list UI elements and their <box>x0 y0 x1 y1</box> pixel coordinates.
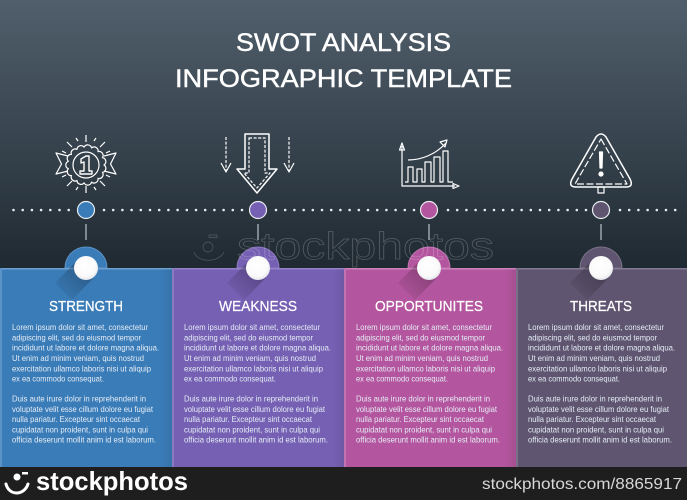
body text: voluptate velit esse cillum dolore eu fugiat <box>356 404 498 414</box>
panel: weakness <box>172 247 344 467</box>
body text: voluptate velit esse cillum dolore eu fugiat <box>12 404 154 414</box>
body text: incididunt ut labore et dolore magna aliqua. <box>12 343 159 353</box>
body text: Duis aute irure dolor in reprehenderit in <box>184 394 318 404</box>
panel: opportunities <box>344 247 516 467</box>
body text <box>184 322 331 445</box>
body text <box>528 322 675 445</box>
body text: nulla pariatur. Excepteur sint occaecat <box>12 414 141 424</box>
icon: down arrow <box>221 134 294 193</box>
body text <box>356 322 503 445</box>
body text: officia deserunt mollit anim id est laborum. <box>184 435 328 445</box>
body text: ex ea commodo consequat. <box>356 374 448 384</box>
body text: adipiscing elit, sed do eiusmod tempor <box>12 332 141 342</box>
knob <box>246 256 270 280</box>
body text: Ut enim ad minim veniam, quis nostrud <box>184 353 316 363</box>
body text: exercitation ullamco laboris nisi ut aliquip <box>12 363 151 373</box>
body text: Ut enim ad minim veniam, quis nostrud <box>356 353 488 363</box>
footer logo: stockphotos <box>36 466 188 496</box>
title: INFOGRAPHIC TEMPLATE <box>175 65 512 93</box>
icon: medal <box>56 135 116 193</box>
body text: Lorem ipsum dolor sit amet, consectetur <box>12 322 148 332</box>
panel: threats <box>516 247 687 467</box>
body text: Duis aute irure dolor in reprehenderit in <box>12 394 146 404</box>
watermark: stockphotos <box>237 226 494 268</box>
title: SWOT ANALYSIS <box>236 29 451 57</box>
background <box>0 0 687 268</box>
body text: exercitation ullamco laboris nisi ut aliquip <box>356 363 495 373</box>
body text: adipiscing elit, sed do eiusmod tempor <box>356 332 485 342</box>
title <box>175 29 512 93</box>
timeline nodes and connectors <box>78 202 610 240</box>
body text: nulla pariatur. Excepteur sint occaecat <box>356 414 485 424</box>
body text: nulla pariatur. Excepteur sint occaecat <box>184 414 313 424</box>
panel: strength <box>0 247 172 467</box>
body text <box>12 322 159 445</box>
knob <box>74 256 98 280</box>
body text: ex ea commodo consequat. <box>528 374 620 384</box>
heading: OPPORTUNITES <box>375 299 483 315</box>
watermark <box>194 226 494 268</box>
icon: warning sign <box>571 134 631 193</box>
body text: incididunt ut labore et dolore magna aliqua. <box>356 343 503 353</box>
body text: officia deserunt mollit anim id est laborum. <box>528 435 672 445</box>
body text: officia deserunt mollit anim id est laborum. <box>356 435 500 445</box>
body text: Duis aute irure dolor in reprehenderit in <box>356 394 490 404</box>
footer bar <box>0 467 687 500</box>
body text: incididunt ut labore et dolore magna aliqua. <box>184 343 331 353</box>
icon: growth chart <box>400 140 459 188</box>
body text: cupidatat non proident, sunt in culpa qui <box>356 424 492 434</box>
body text: ex ea commodo consequat. <box>184 374 276 384</box>
dotted timeline <box>14 209 676 211</box>
footer image id: stockphotos.com/8865917 <box>482 476 682 493</box>
body text: cupidatat non proident, sunt in culpa qui <box>12 424 148 434</box>
body text: cupidatat non proident, sunt in culpa qui <box>528 424 664 434</box>
body text: Ut enim ad minim veniam, quis nostrud <box>12 353 144 363</box>
body text: ex ea commodo consequat. <box>12 374 104 384</box>
body text: exercitation ullamco laboris nisi ut aliquip <box>528 363 667 373</box>
body text: exercitation ullamco laboris nisi ut aliquip <box>184 363 323 373</box>
body text: Lorem ipsum dolor sit amet, consectetur <box>356 322 492 332</box>
body text: adipiscing elit, sed do eiusmod tempor <box>184 332 313 342</box>
body text: adipiscing elit, sed do eiusmod tempor <box>528 332 657 342</box>
body text: Ut enim ad minim veniam, quis nostrud <box>528 353 660 363</box>
body text: voluptate velit esse cillum dolore eu fugiat <box>528 404 670 414</box>
body text: cupidatat non proident, sunt in culpa qui <box>184 424 320 434</box>
body text: Lorem ipsum dolor sit amet, consectetur <box>184 322 320 332</box>
heading: THREATS <box>570 299 632 315</box>
body text: Duis aute irure dolor in reprehenderit in <box>528 394 662 404</box>
heading: STRENGTH <box>49 299 123 315</box>
body text: voluptate velit esse cillum dolore eu fugiat <box>184 404 326 414</box>
heading: WEAKNESS <box>219 299 297 315</box>
body text: nulla pariatur. Excepteur sint occaecat <box>528 414 657 424</box>
body text: officia deserunt mollit anim id est laborum. <box>12 435 156 445</box>
knob <box>417 256 441 280</box>
body text: Lorem ipsum dolor sit amet, consectetur <box>528 322 664 332</box>
knob <box>589 256 613 280</box>
